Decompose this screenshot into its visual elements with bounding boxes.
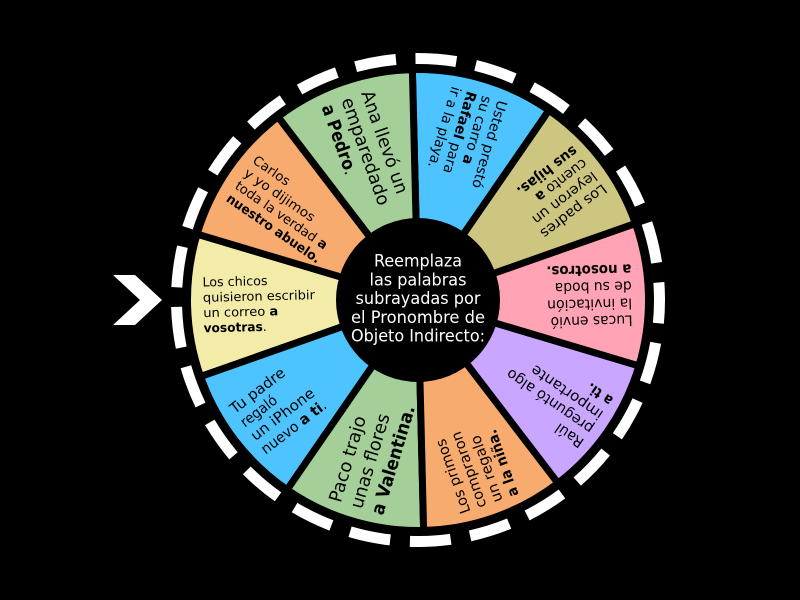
text: Carlos — [223, 153, 349, 267]
text: Los chicos — [202, 272, 317, 335]
text: Raúl: a ti. — [583, 379, 616, 409]
text: Tu padre: Tu padre — [226, 364, 289, 418]
text: Lucas: de su boda — [555, 277, 632, 296]
text: Paco — [325, 391, 420, 517]
text: Paco: Paco trajo — [325, 414, 371, 505]
sector: green — [274, 59, 485, 324]
panel: Raúl — [378, 241, 648, 490]
text: Los chicos: vosotras. — [203, 319, 267, 335]
text: Raúl: preguntó algo — [503, 365, 597, 437]
text: Ana: Ana llevó un — [356, 88, 412, 197]
text: Tu padre: nuevo a ti. — [258, 397, 330, 458]
panel: Los padres — [375, 103, 644, 357]
hub instruction text: subrayadas por — [356, 289, 481, 308]
text: Lucas: Lucas envió — [550, 311, 633, 330]
text: Los chicos: Los chicos — [202, 273, 268, 290]
hub instruction text: el Pronombre de — [351, 308, 485, 327]
sector: lavender — [378, 241, 648, 490]
panel: Lucas — [416, 223, 650, 371]
text: Tu padre: un iPhone — [247, 385, 318, 444]
text: Ana: emparedado — [337, 95, 394, 208]
text: Raúl — [494, 337, 616, 451]
text: Usted — [422, 85, 509, 190]
text: Carlos: nuestro abuelo. — [223, 192, 323, 267]
sector: blue — [350, 59, 552, 320]
text: Los primos: compraron — [448, 429, 490, 510]
text: Los padres: cuento a — [532, 155, 590, 205]
text: Lucas — [546, 260, 633, 330]
text: Los padres — [508, 142, 609, 241]
dashed outer ring — [174, 56, 662, 544]
text: Los padres: leyeron un — [529, 168, 600, 227]
text: Lucas: a nosotros. — [546, 260, 632, 279]
text: Los chicos: un correo a — [203, 303, 278, 320]
text: Ana — [317, 88, 414, 215]
text: Carlos: Carlos — [249, 153, 293, 190]
sector: khaki — [375, 103, 644, 357]
text: Usted: Rafael para — [439, 89, 479, 175]
sector: orange — [351, 276, 562, 541]
text: Carlos: y yo dijimos — [241, 166, 318, 226]
sector: green — [284, 280, 486, 541]
center hub — [336, 218, 500, 382]
text: Raúl: importante — [528, 361, 607, 423]
panel: Usted — [350, 59, 552, 320]
text: Usted: Usted prestó — [468, 98, 509, 190]
sector: pink — [416, 223, 650, 371]
panel: Los primos — [351, 276, 562, 541]
text: Raúl: Raúl — [552, 419, 587, 451]
text: Los primos: a la niña. — [483, 427, 523, 499]
text: Los padres: sus hijas. — [513, 142, 580, 199]
hub circle — [336, 218, 500, 382]
panel: Tu padre — [192, 243, 461, 497]
panel: Carlos — [188, 110, 458, 359]
sector: yellow — [186, 229, 420, 377]
text: Ana: a Pedro. — [317, 102, 361, 178]
text: Los primos — [432, 418, 523, 516]
panel: Ana — [274, 59, 485, 324]
sector: blue — [192, 243, 461, 497]
text: Paco: unas flores — [346, 411, 395, 511]
sector: orange — [188, 110, 458, 359]
text: Los padres: Los padres — [537, 180, 609, 241]
hub instruction text: las palabras — [370, 270, 466, 289]
text: Tu padre — [226, 357, 330, 459]
hub instruction text: Objeto Indirecto: — [351, 327, 485, 346]
text: Usted: su carro a — [458, 94, 494, 166]
text: Tu padre: regaló — [237, 392, 281, 431]
text: Los primos: un regalo — [467, 433, 506, 505]
hub instruction text — [351, 252, 485, 346]
text: Los chicos: quisieron escribir — [203, 287, 316, 305]
text: Los primos: Los primos — [432, 437, 474, 516]
pointer arrow — [113, 275, 162, 325]
text: Carlos: toda la verdad a — [232, 179, 330, 253]
hub instruction text: Reemplaza — [374, 252, 462, 271]
panel: Los chicos — [186, 229, 420, 377]
text: Paco: a Valentina. — [368, 403, 420, 517]
text: Usted: ir a la playa. — [424, 85, 463, 170]
text: Lucas: la invitación — [547, 294, 632, 313]
panel: Paco — [284, 280, 486, 541]
